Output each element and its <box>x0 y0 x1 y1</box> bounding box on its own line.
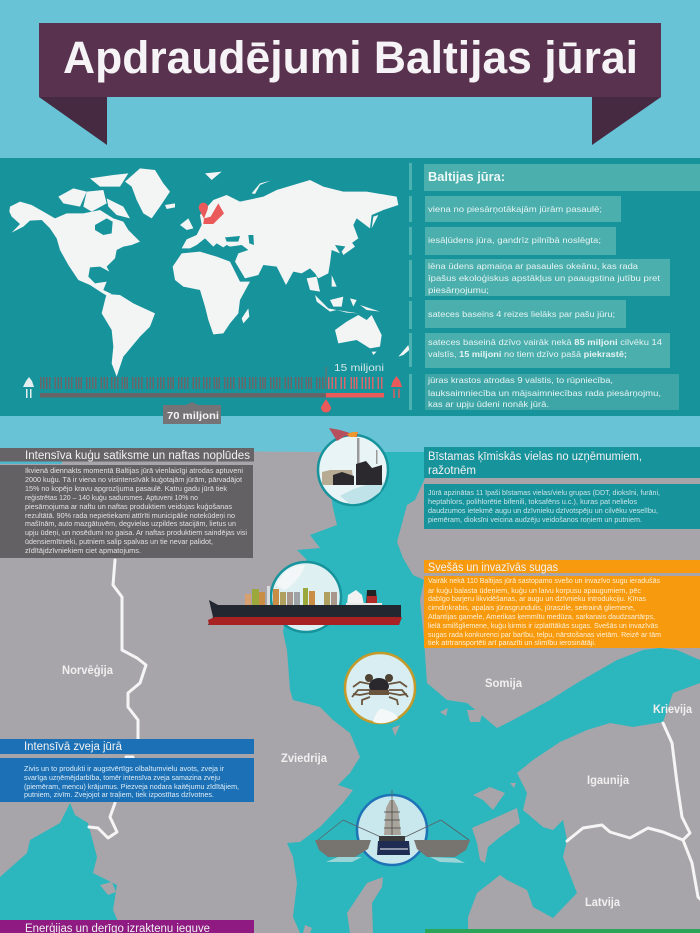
fact 4: sateces baseins 4 reizes lielāks par pašu jūru; <box>428 309 615 319</box>
country label: Somija: Somija <box>485 676 522 690</box>
icon: factory circle <box>318 428 388 505</box>
body text: sugas rada konkurenci par barību, telpu, nārstošanas vietām. Reizē ar tām <box>428 630 661 639</box>
body text <box>424 576 700 648</box>
fact 3: piesārņojumu; <box>428 285 489 295</box>
ship superstructure <box>346 590 382 606</box>
panel: ship traffic and oil spills <box>0 448 254 558</box>
cargo containers <box>245 586 337 605</box>
fact 6 <box>425 374 679 410</box>
fact 3 <box>425 259 670 296</box>
body text: Vairāk nekā 110 Baltijas jūrā sastopamo svešo un invazīvo sugu ieradušās <box>428 576 660 585</box>
body text: upju ūdeņi, un nosēdumi no gaisa. Ar naftas produktiem saindējas visi <box>25 528 247 537</box>
world map <box>9 168 409 377</box>
body text: rezultātā. 90% rada nepietiekami attīrīti municipālie notekūdeņi no <box>25 511 235 520</box>
body text: heptahlors, polihlorētie bifenili, toksafēns u.c.), kuras pat nelielos <box>428 497 637 506</box>
body text: cimdiņkrabis, apaļais jūrasgrundulis, jūraszile, seitrainā gliemene, <box>428 603 635 612</box>
heading <box>424 560 700 574</box>
body text: 2000 kuģu. Tā ir viena no visintensīvāk kuģotajām jūrām, pārvadājot <box>25 475 243 484</box>
fact 5 <box>425 333 670 368</box>
body text: ūdensiemītnieki, putniem salip spalvas un tie nevar palidot, <box>25 537 213 546</box>
heading: Intensīva kuģu satiksme un naftas noplūdes <box>25 449 250 462</box>
body text: ar kuģu balasta ūdeņiem, kuģu un laivu korpusu apaugumiem, pēc <box>428 586 641 595</box>
country label: Igaunija: Igaunija <box>587 773 629 787</box>
facts heading: Baltijas jūra: <box>428 169 505 184</box>
panel: hazardous chemicals <box>424 447 700 529</box>
fact 2: iesāļūdens jūra, gandrīz pilnībā noslēgta; <box>428 235 601 245</box>
body text <box>424 484 700 529</box>
label: 15 miljoni: 15 miljoni <box>334 363 384 374</box>
fact 4 <box>425 300 626 328</box>
body text: (piemēram, mencu) krājumus. Piezveja nodara kaitējumu zīdītājiem, <box>24 782 239 791</box>
body text: tiek atrtransportēti arī parazīti un slimību ierosinātāji. <box>428 638 596 647</box>
country label: Zviedrija: Zviedrija <box>281 751 327 765</box>
fact 1 <box>425 196 621 222</box>
country label: Norvēģija: Norvēģija <box>62 663 113 677</box>
title banner: Apdraudējumi Baltijas jūrai <box>63 32 638 83</box>
fact 1: viena no piesārņotākajām jūrām pasaulē; <box>428 204 602 214</box>
body text: 15% no kopējo kravu apgrozījuma pasaulē. Katru gadu jūrā tiek <box>25 484 227 493</box>
icon: person red <box>391 376 402 398</box>
icon: person grey <box>23 377 34 398</box>
body text: Atlantijas garnele, Amerikas ķemmītu medūza, sarkanais daudzsartārps, <box>428 612 655 621</box>
body text: Ikvienā diennakts momentā Baltijas jūrā vienlaicīgi atrodas aptuveni <box>25 466 243 475</box>
fact 3: lēna ūdens apmaiņa ar pasaules okeānu, kas rada <box>428 261 638 271</box>
fact 6: lauksaimniecība un mājsaimniecības rada piesārņojmu, <box>428 388 661 398</box>
map of the Baltic Sea region <box>0 451 700 933</box>
body text <box>0 758 254 802</box>
body text: zīdītājdzīvniekiem ciet apmatojums. <box>25 546 141 555</box>
heading: ražotnēm <box>428 465 476 477</box>
panel: energy and mineral extraction <box>0 920 254 933</box>
heading: Intensīvā zveja jūrā <box>24 741 123 753</box>
body text: dabīgo barjeru likvidēšanas, ar augu un dzīvnieku introdukciju. Ķīnas <box>428 594 646 603</box>
body text: mašīnām, auto mazgātuvēm, degvielas uzpildes stacijām, lietus un <box>25 519 236 528</box>
country label: Latvija: Latvija <box>585 895 620 909</box>
icon: cargo ship circle <box>208 562 402 632</box>
body text: lielā smilšgliemene, kuģu ķirmis ir izplatītākās sugas. Svešās un invazīvās <box>428 621 658 630</box>
fact 5: valstīs, 15 miljoni no tiem dzīvo pašā piekrastē; <box>428 349 627 359</box>
icon: Baltic region marker <box>199 203 224 224</box>
panel: intensive fishing <box>0 739 254 802</box>
heading <box>0 739 254 754</box>
Baltic facts list <box>409 163 700 410</box>
panel: world map and Baltic facts <box>0 158 700 424</box>
icon: red drop <box>321 399 331 412</box>
label: 70 miljoni <box>163 402 221 424</box>
fact 6: kas ar upju ūdeni nonāk jūrā. <box>428 399 549 409</box>
population scale bar <box>23 363 402 424</box>
icon: crab circle <box>345 653 415 723</box>
body text: piesārņojuma ar naftu un naftas produktiem veidojas kuģošanas <box>25 502 232 511</box>
country label: Krievija: Krievija <box>653 702 692 716</box>
heading: Bīstamas ķīmiskās vielas no uzņēmumiem, <box>428 451 642 463</box>
label: 70 miljoni: 70 miljoni <box>167 410 219 422</box>
body text: reģistrētas 120 – 140 kuģu sadursmes. Aptuveni 10% no <box>25 493 198 502</box>
heading <box>424 447 700 478</box>
title banner <box>39 23 661 145</box>
fact 2 <box>425 227 616 255</box>
body text: Zivis un to produkti ir augstvērtīgs olbaltumvielu avots, zveja ir <box>24 764 224 773</box>
fact 3: īpašus ekoloģiskus apstākļus un paaugstina jutību pret <box>428 273 661 283</box>
panel: green section top edge <box>425 929 700 933</box>
trawl nets <box>315 840 470 857</box>
panel: invasive species <box>424 560 700 648</box>
body text: piemēram, dioksīni veicina audzēju veidošanos roņiem un putniem. <box>428 515 642 524</box>
body text: daudzumos ietekmē augu un dzīvnieku dzīvotspēju un cilvēku veselību, <box>428 506 658 515</box>
facts heading <box>424 164 700 191</box>
body text: svarīga uzņēmējdarbība, tomēr intensīva zveja samazina zveju <box>24 773 220 782</box>
heading: Svešās un invazīvās sugas <box>428 562 558 574</box>
icon: fishing trawler circle <box>315 790 470 865</box>
fact 6: jūras krastos atrodas 9 valstis, to rūpniecība, <box>427 375 613 385</box>
body text <box>0 465 253 558</box>
body text: Jūrā apzinātas 11 īpaši bīstamas vielas/vielu grupas (DDT, dioksīni, furāni, <box>428 488 660 497</box>
body text: putniem, zivīm. Zvejojot ar traļiem, tiek izpostītas dzīvotnes. <box>24 790 214 799</box>
fact 5: sateces baseinā dzīvo vairāk nekā 85 miljoni cilvēku 14 <box>428 337 662 347</box>
